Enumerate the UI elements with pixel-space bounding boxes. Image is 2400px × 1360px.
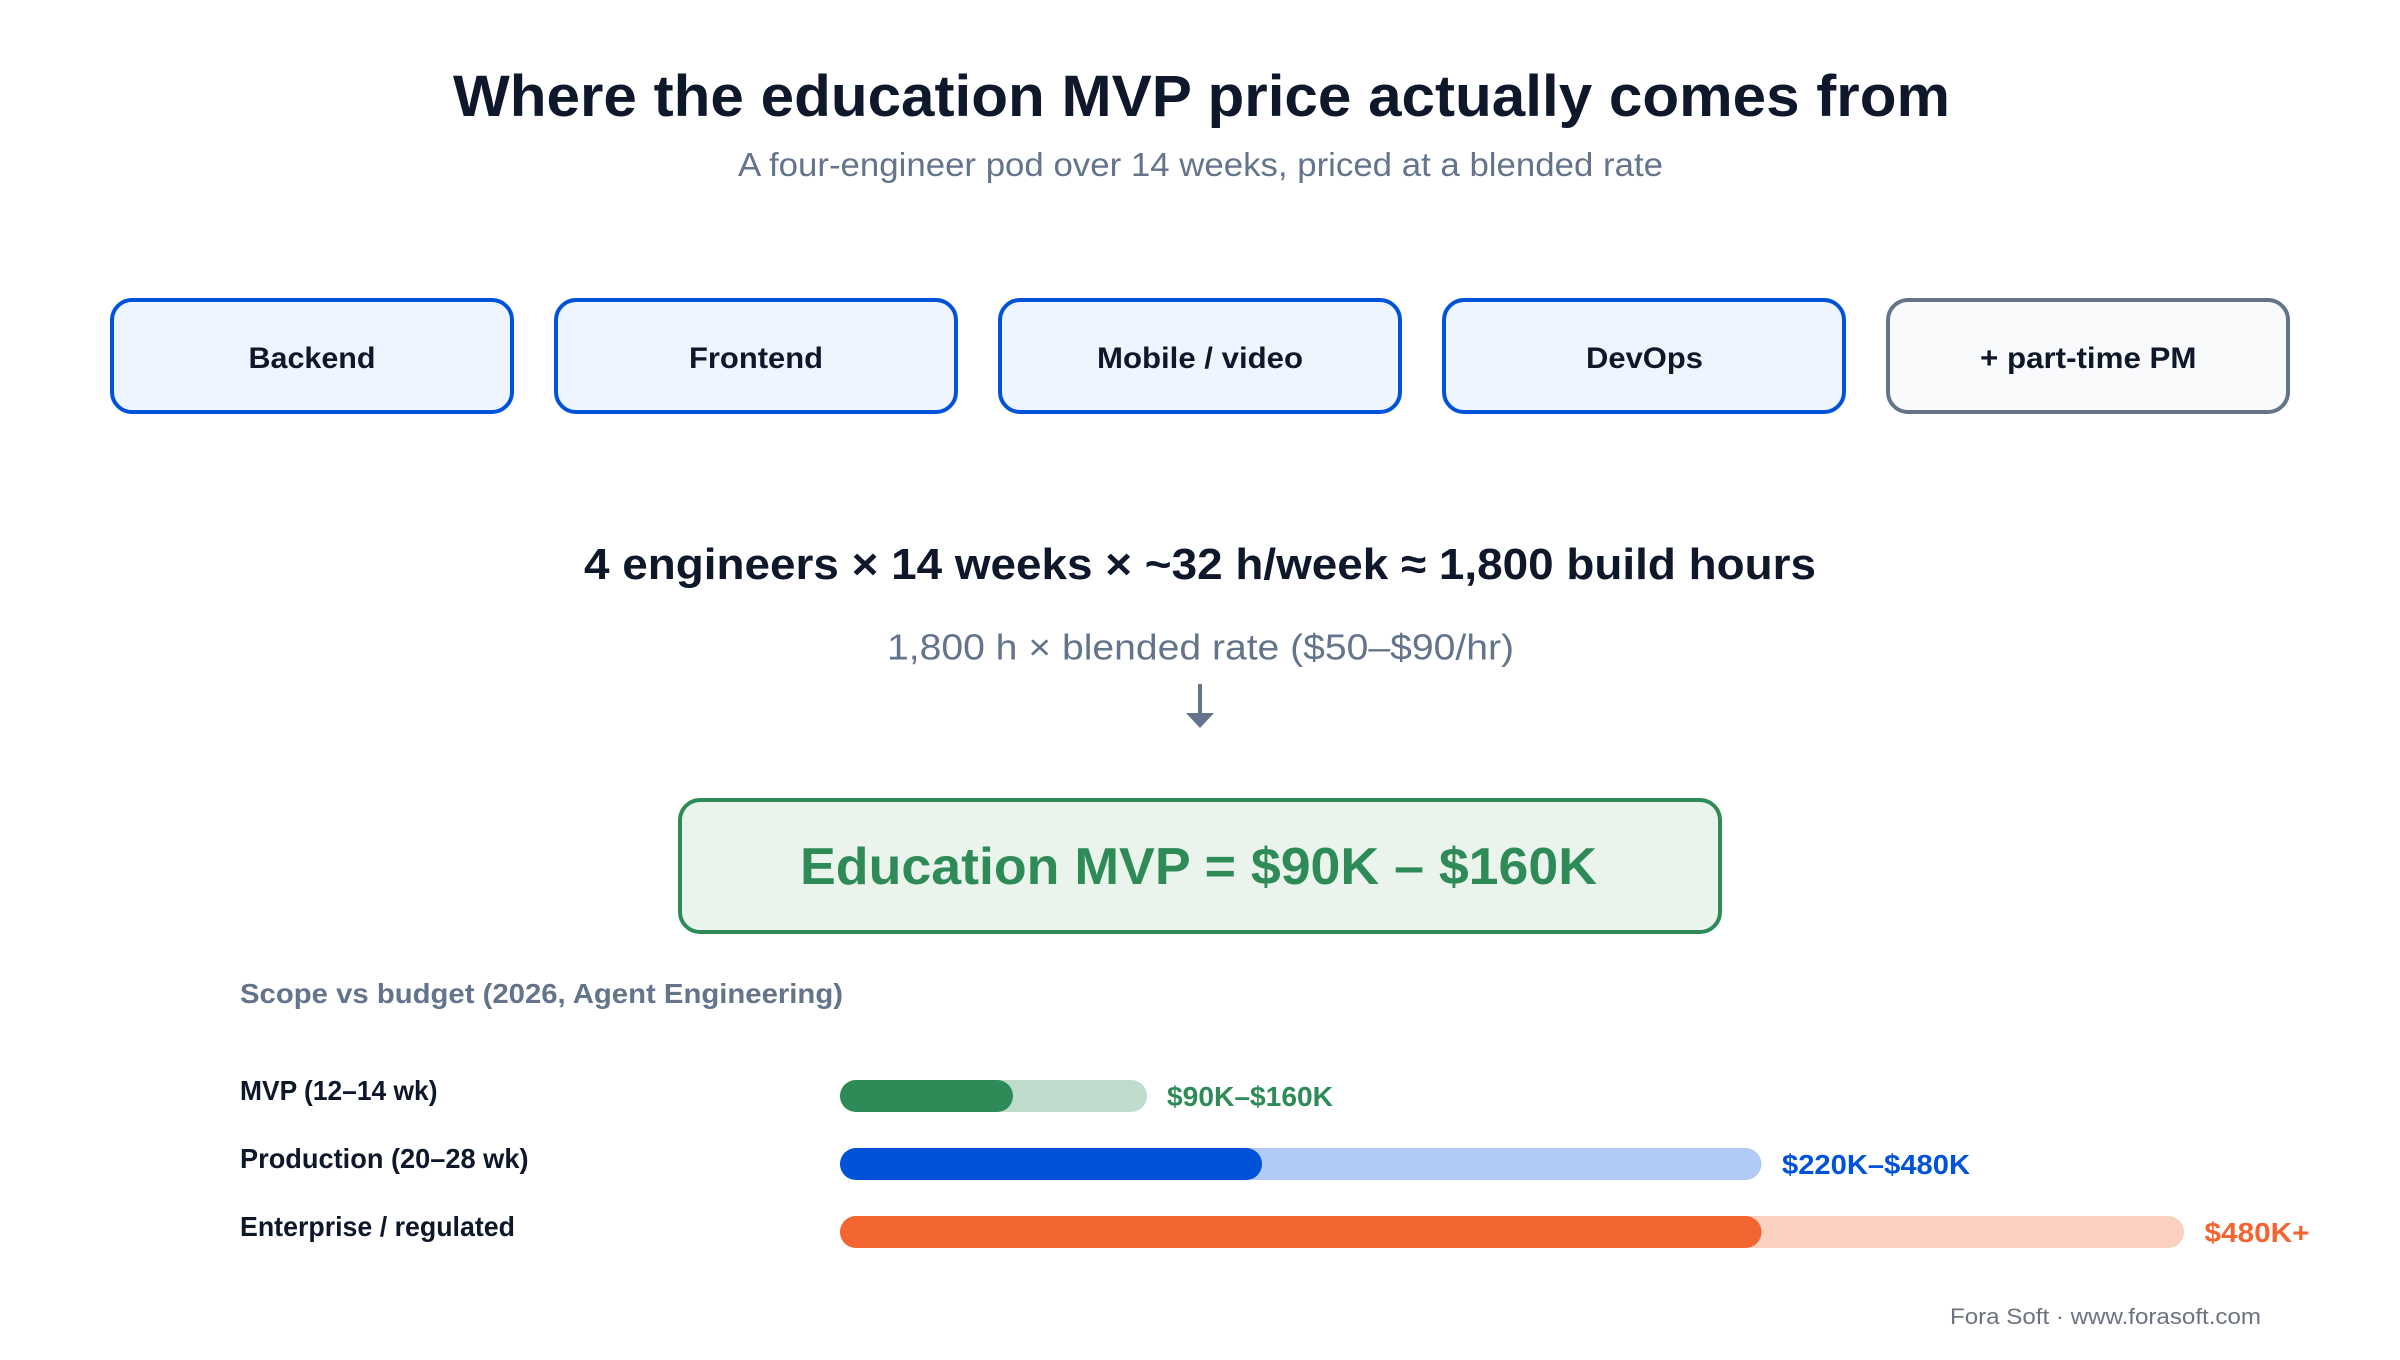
callout: MVP price — [680, 800, 1720, 932]
title: Where the education MVP price actually comes from — [453, 64, 1950, 129]
role card: Backend — [112, 300, 512, 412]
panel: team roles — [112, 300, 2288, 412]
bar row: Production — [240, 1143, 1970, 1180]
role card: Frontend — [556, 300, 956, 412]
build hours equation: 4 engineers × 14 weeks × ~32 h/week ≈ 1,800 build hours — [584, 540, 1816, 589]
role card: Mobile / video — [1000, 300, 1400, 412]
bar row: MVP — [240, 1075, 1333, 1112]
role card: DevOps: DevOps — [1586, 342, 1703, 375]
role card: Mobile / video: Mobile / video — [1097, 342, 1303, 375]
bar row: Enterprise — [240, 1211, 2310, 1248]
role card: part-time PM: + part-time PM — [1980, 342, 2196, 375]
bar row: MVP: MVP (12–14 wk) — [240, 1075, 438, 1106]
subtitle: A four-engineer pod over 14 weeks, priced at a blended rate — [738, 146, 1663, 183]
blended rate formula: 1,800 h × blended rate ($50–$90/hr) — [887, 626, 1514, 668]
bar row: Production: Production (20–28 wk) — [240, 1143, 528, 1174]
role card: DevOps — [1444, 300, 1844, 412]
bar row: MVP: $90K–$160K — [1167, 1081, 1333, 1112]
role card: Backend: Backend — [248, 342, 376, 375]
role card: part-time PM — [1888, 300, 2288, 412]
role card: Frontend: Frontend — [689, 342, 823, 375]
footer credit: Fora Soft · www.forasoft.com — [1950, 1304, 2261, 1329]
arrow: down to price — [1186, 684, 1214, 728]
callout: MVP price: Education MVP = $90K – $160K — [800, 838, 1597, 896]
bar chart: scope vs budget — [240, 1075, 2310, 1248]
bar row: Enterprise: $480K+ — [2204, 1217, 2310, 1248]
bar row: Production: $220K–$480K — [1782, 1149, 1970, 1180]
bar row: Enterprise: Enterprise / regulated — [240, 1211, 515, 1242]
chart heading: Scope vs budget (2026, Agent Engineering) — [240, 978, 843, 1009]
